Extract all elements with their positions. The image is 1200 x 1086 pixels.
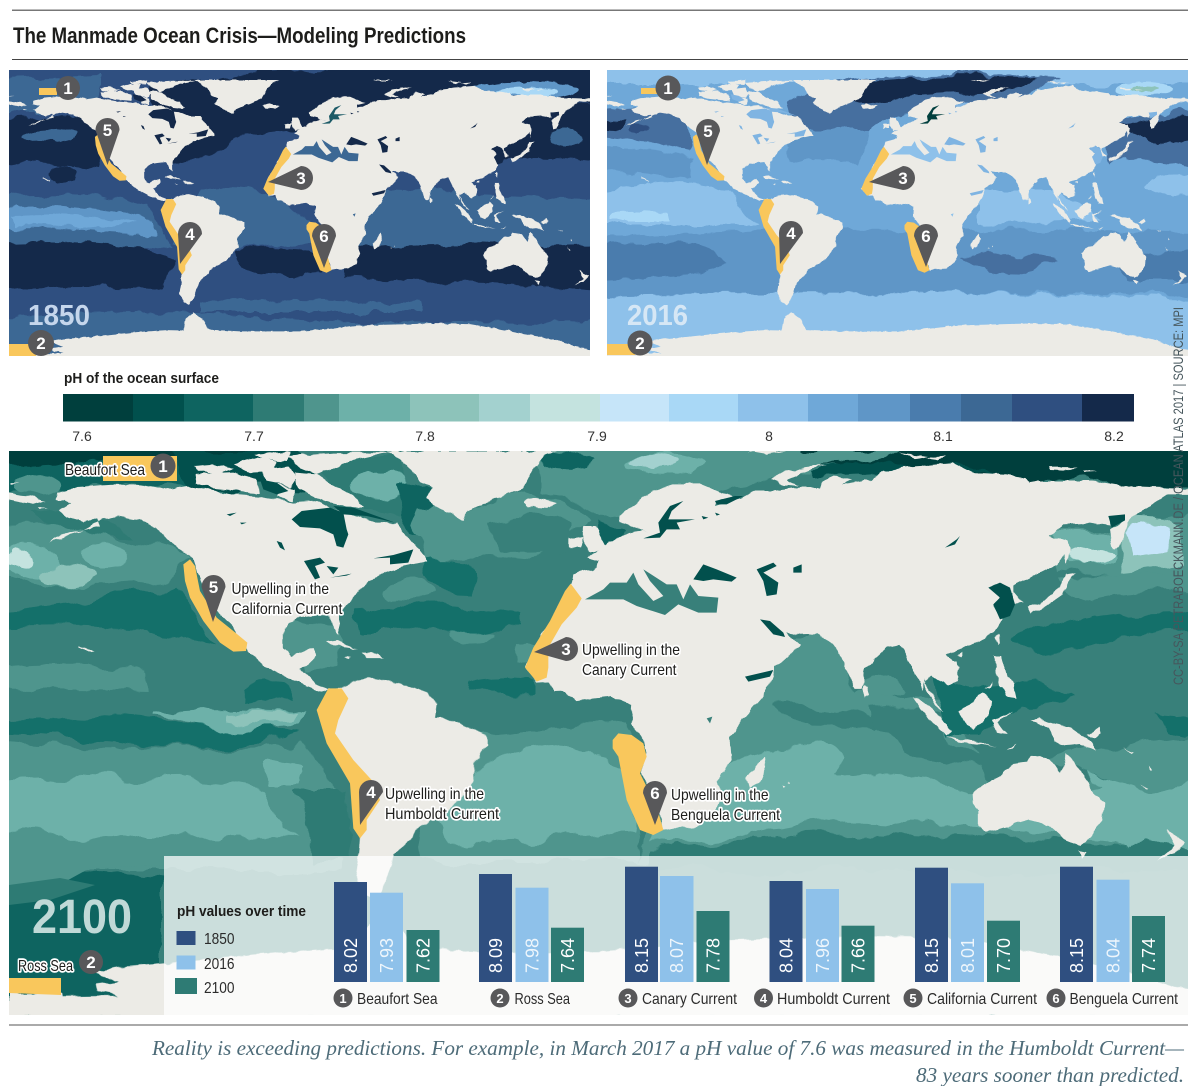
pin 5: 5 [703, 122, 713, 141]
bars: Beaufort Sea: 1 [339, 991, 347, 1006]
scale ticks: 7.6 [72, 428, 92, 444]
bars: California Current: California Current [927, 991, 1037, 1008]
pin 5 [696, 119, 720, 165]
pin 4 [178, 222, 202, 264]
label California [232, 581, 343, 618]
pin 1: 1 [63, 79, 73, 98]
bars: Canary Current [618, 867, 737, 1008]
legend 2100: 2100 [204, 980, 235, 997]
scale ticks: 8.2 [1104, 428, 1124, 444]
pin 3 [869, 166, 915, 190]
bars: Benguela Current: 6 [1052, 991, 1060, 1006]
pin 6 Benguela: 6 [650, 784, 660, 803]
bars: Beaufort Sea: 7.93 [377, 938, 397, 973]
label Benguela: Upwelling in the [671, 787, 769, 804]
scale ticks [72, 428, 1124, 444]
bars: Humboldt Current: 7.66 [848, 938, 868, 973]
chart panel background [164, 856, 1188, 1015]
scale ticks: 7.7 [244, 428, 264, 444]
label California: California Current [232, 601, 343, 618]
pin 6: 6 [319, 227, 329, 246]
bars: Humboldt Current: 4 [760, 991, 768, 1006]
current highlights 1850 [9, 88, 331, 356]
bars: Ross Sea: Ross Sea [514, 991, 570, 1008]
bottom rule [9, 1024, 1188, 1026]
scale ticks: 8 [765, 428, 773, 444]
chart legend [175, 903, 306, 997]
pin 6 [914, 224, 938, 267]
pin 2: 2 [86, 953, 96, 972]
bars: California Current [904, 868, 1037, 1008]
pin 6 [312, 224, 336, 268]
pin 1: 1 [663, 79, 673, 98]
bars: Benguela Current: 8.04 [1104, 938, 1124, 973]
pin 3 Canary: 3 [561, 640, 571, 659]
top rule [12, 10, 1188, 11]
pin 1: 1 [158, 457, 168, 476]
bars: Ross Sea: 7.98 [522, 938, 542, 973]
bars: Ross Sea: 2 [496, 991, 504, 1006]
pin 2 [28, 330, 54, 356]
label Humboldt: Humboldt Current [385, 806, 499, 823]
bars: Humboldt Current: 8.04 [776, 938, 796, 973]
bars: Canary Current: 8.15 [632, 938, 652, 973]
Beaufort Sea label: Beaufort Sea [65, 462, 145, 479]
colour scale [63, 394, 1134, 422]
bars: Ross Sea: 8.09 [486, 938, 506, 973]
year 2016: 2016 [627, 300, 688, 332]
pin 2: 2 [635, 334, 645, 353]
map: 1850 ocean pH [0, 65, 600, 366]
Beaufort Sea highlight [103, 456, 177, 481]
year 1850: 1850 [28, 300, 90, 332]
bars: Ross Sea: 7.64 [558, 938, 578, 973]
scale ticks: 7.8 [415, 428, 435, 444]
pin 4 Humboldt: 4 [366, 783, 376, 802]
scale ticks: 7.9 [587, 428, 607, 444]
pin 5 California: 5 [209, 578, 218, 597]
pin 4 [779, 221, 803, 264]
pin 2: 2 [36, 334, 46, 353]
pH legend [63, 371, 1134, 444]
label Humboldt [385, 786, 499, 823]
bars: California Current: 8.15 [922, 938, 942, 973]
pin 1 [150, 454, 176, 478]
bars: Canary Current: 8.07 [667, 938, 687, 973]
bars: Benguela Current: 8.15 [1067, 938, 1087, 973]
pin 5 [96, 118, 120, 165]
pin 2 [79, 950, 103, 974]
title: The Manmade Ocean Crisis—Modeling Predictions [13, 23, 466, 48]
bars: Humboldt Current [754, 881, 890, 1008]
pin 6: 6 [921, 227, 931, 246]
bars: Humboldt Current: 7.96 [813, 938, 833, 973]
pin 4 Humboldt [359, 780, 383, 825]
bars: Benguela Current: Benguela Current [1070, 991, 1178, 1008]
Ross Sea highlight [9, 978, 61, 995]
chart legend heading: pH values over time [177, 903, 306, 920]
bars: Canary Current: Canary Current [642, 991, 737, 1008]
label Benguela: Benguela Current [671, 807, 780, 824]
bars: Benguela Current [1046, 867, 1178, 1008]
label California: Upwelling in the [232, 581, 329, 598]
pin 5 California [202, 575, 226, 622]
bars: Beaufort Sea: 8.02 [341, 938, 361, 973]
map: 2100 ocean pH [0, 440, 1200, 1020]
legend heading: pH of the ocean surface [64, 371, 219, 387]
bars: Benguela Current: 7.74 [1139, 938, 1159, 973]
pin 1 [656, 76, 680, 100]
bars: Ross Sea [479, 874, 584, 1008]
label Canary: Upwelling in the [582, 642, 680, 659]
bars: Canary Current: 3 [624, 991, 632, 1006]
bars: Beaufort Sea [334, 882, 440, 1008]
pin 3 [268, 166, 313, 190]
title rule [12, 59, 1188, 60]
pin 4: 4 [786, 224, 796, 243]
closing note: Reality is exceeding predictions. For example, in March 2017 a pH value of 7.6 was measured in the Humboldt Current— [151, 1036, 1184, 1060]
bars: California Current: 8.01 [958, 938, 978, 973]
upwelling current highlights [183, 559, 663, 838]
pin 3: 3 [296, 169, 306, 188]
label Canary [582, 642, 680, 679]
pin 2 [628, 330, 652, 356]
pin 3 Canary [534, 637, 578, 661]
label Benguela [671, 787, 780, 824]
bars: Canary Current: 7.78 [704, 938, 724, 973]
pin 5: 5 [103, 121, 112, 140]
legend 1850: 1850 [204, 931, 235, 948]
legend 2016: 2016 [204, 956, 235, 973]
Ross Sea label: Ross Sea [18, 958, 73, 975]
closing note [151, 1036, 1184, 1086]
year 2100: 2100 [32, 891, 132, 944]
pin 6 Benguela [643, 781, 667, 825]
pin 1 [56, 76, 80, 100]
bars: California Current: 7.70 [994, 938, 1014, 973]
pin 3: 3 [898, 169, 908, 188]
label Canary: Canary Current [582, 662, 677, 679]
bars: Humboldt Current: Humboldt Current [777, 991, 890, 1008]
map: 2016 ocean pH [600, 62, 1200, 366]
current highlights 2016 [607, 88, 929, 355]
bars: Beaufort Sea: Beaufort Sea [357, 991, 438, 1008]
source credit: CC-BY-SA PETRABOECKMANN.DE / OCEAN ATLAS 2017 | SOURCE: MPI [1170, 307, 1186, 685]
bars: California Current: 5 [909, 991, 917, 1006]
bars: Beaufort Sea: 7.62 [414, 938, 434, 973]
scale ticks: 8.1 [933, 428, 953, 444]
label Humboldt: Upwelling in the [385, 786, 484, 803]
pin 4: 4 [185, 225, 195, 244]
